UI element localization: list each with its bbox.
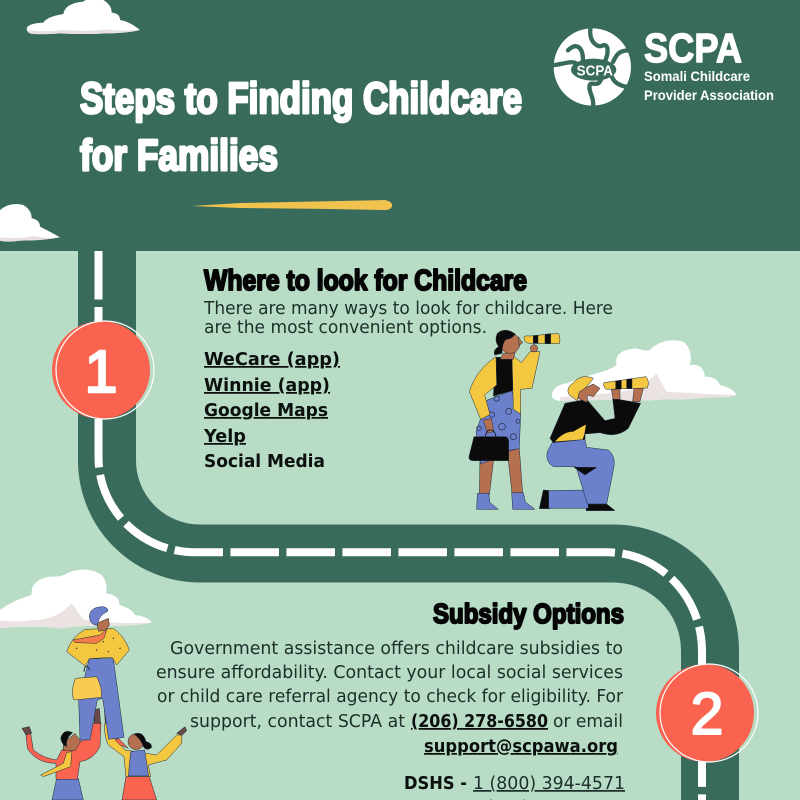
DSHS contact: 1 (800) 394-4571 — [473, 774, 625, 794]
top figure with handbag — [67, 607, 129, 748]
cloud: lower header — [0, 204, 60, 242]
subsidy description — [156, 639, 624, 732]
illustration: two women with spyglasses and cloud — [469, 330, 737, 511]
intro text: are the most convenient options. — [204, 318, 487, 338]
intro text: There are many ways to look for childcare. Here — [203, 299, 613, 319]
DSHS contact — [404, 774, 625, 800]
step 1 badge: 1 — [85, 339, 117, 405]
phone number: (206) 278-6580 — [411, 712, 548, 732]
list of childcare sources: WeCare (app) — [204, 350, 340, 370]
cloud: behind spyglass — [552, 340, 737, 401]
heading: subsidy options: Subsidy Options — [433, 598, 624, 629]
list of childcare sources: Social Media — [204, 452, 325, 472]
list of childcare sources: Yelp — [203, 427, 246, 447]
standing woman — [469, 330, 560, 509]
heading: where to look: Where to look for Childcare — [204, 265, 527, 297]
logo: SCPA — [553, 25, 774, 108]
email link: support@scpawa.org — [424, 737, 618, 757]
subsidy description: or child care referral agency to check for eligibility. For — [157, 687, 624, 707]
subsidy description: Government assistance offers childcare subsidies to — [170, 639, 623, 659]
header band — [0, 0, 800, 251]
logo wordmark: SCPA — [644, 25, 742, 71]
yellow brush underline — [192, 200, 392, 210]
right lower figure — [104, 707, 187, 800]
subsidy description: or email — [553, 712, 623, 732]
logo emblem: SCPA — [577, 63, 613, 79]
logo wordmark: Provider Association — [644, 87, 774, 103]
intro text — [203, 299, 613, 338]
logo wordmark: Somali Childcare — [644, 68, 750, 84]
DSHS contact: DSHS - — [404, 774, 467, 794]
logo wordmark — [644, 25, 774, 103]
title — [80, 74, 522, 180]
subsidy description: ensure affordability. Contact your local social services — [156, 663, 623, 683]
cloud: behind pyramid — [0, 570, 152, 628]
title: Steps to Finding Childcare — [80, 74, 522, 123]
left lower figure — [22, 708, 101, 800]
road — [98, 245, 710, 800]
list of childcare sources — [203, 350, 340, 472]
subsidy description: support, contact SCPA at — [190, 712, 405, 732]
list of childcare sources: Google Maps — [204, 401, 328, 421]
step 2 badge: 2 — [691, 681, 723, 747]
list of childcare sources: Winnie (app) — [204, 376, 330, 396]
step 1 badge — [52, 321, 154, 419]
cloud: top header — [27, 0, 140, 34]
step 2 badge — [656, 664, 758, 762]
logo emblem — [553, 27, 631, 108]
title: for Families — [80, 131, 278, 180]
kneeling woman — [539, 377, 648, 511]
illustration: human pyramid and cloud — [0, 570, 187, 800]
